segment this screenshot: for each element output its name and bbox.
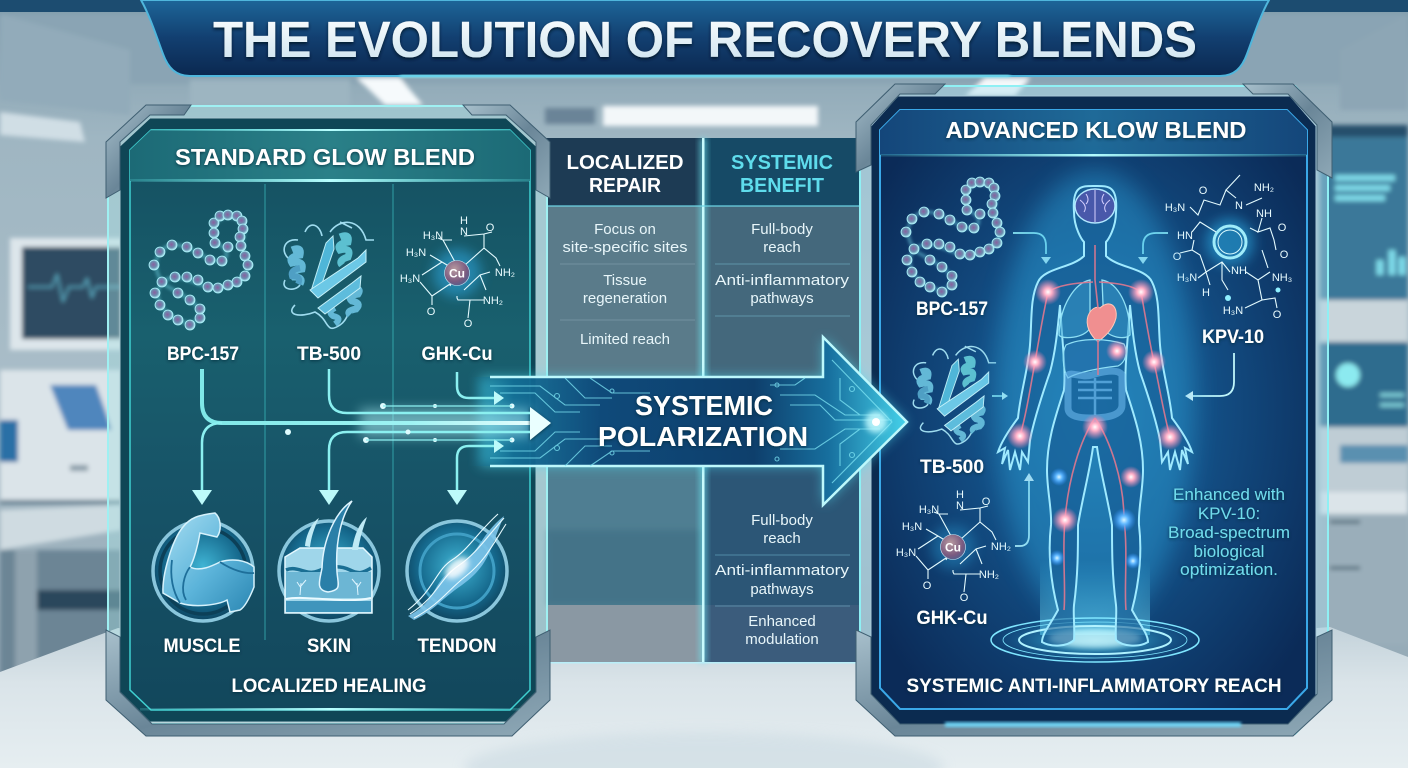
GHK-Cu molecule: NH₂ [483, 295, 503, 307]
circuit traces [490, 360, 892, 483]
label: BPC-157: BPC-157 [916, 299, 988, 320]
GHK-Cu molecule: H₃N [400, 273, 420, 285]
arrow: TB-500 to body [992, 392, 1008, 400]
column: localized repair: LOCALIZED [566, 152, 684, 174]
column: systemic benefit: SYSTEMIC [731, 152, 833, 174]
callout: enhanced with KPV-10 [1168, 485, 1290, 579]
lungs [1059, 280, 1130, 338]
column: systemic benefit: pathways [750, 290, 814, 307]
GHK-Cu molecule: N [460, 226, 468, 238]
column: systemic benefit: reach [763, 239, 801, 256]
title banner [0, 0, 1408, 78]
GHK-Cu molecule: NH₂ [991, 541, 1011, 553]
column: systemic benefit: pathways [750, 581, 814, 598]
flow arrows from peptides to tissues [192, 369, 551, 505]
GHK-Cu molecule [400, 215, 515, 330]
protein icon [913, 346, 996, 444]
label: TB-500: TB-500 [920, 457, 984, 478]
GHK-Cu molecule: H [956, 489, 964, 501]
icon: skin [279, 501, 379, 621]
label: GHK-Cu: GHK-Cu [422, 344, 492, 365]
callout: enhanced with KPV-10: Broad-spectrum [1168, 523, 1290, 542]
icon: muscle [153, 513, 254, 621]
GHK-Cu molecule: N [956, 500, 964, 512]
GHK-Cu molecule: O [486, 222, 495, 234]
KPV-10 molecule: H₃N [1223, 305, 1243, 317]
column: localized repair: regeneration [583, 290, 667, 307]
GHK-Cu molecule: O [923, 580, 932, 592]
trunk arrow from BPC-157 [192, 369, 530, 505]
column: systemic benefit: modulation [745, 631, 819, 648]
KPV-10 molecule: H [1202, 287, 1210, 299]
GHK-Cu molecule: O [960, 592, 969, 604]
GHK-Cu molecule: O [427, 306, 436, 318]
label: GHK-Cu: GHK-Cu [916, 608, 988, 629]
KPV-10 molecule [1165, 175, 1292, 321]
KPV-10 molecule: O [1173, 251, 1182, 263]
panel: standard glow blend [106, 105, 550, 736]
column: systemic benefit: Enhanced [748, 613, 816, 630]
GHK-Cu molecule: NH₂ [495, 267, 515, 279]
hologram platform [989, 560, 1201, 664]
brain [1075, 189, 1115, 223]
panel: advanced klow blend [856, 84, 1332, 736]
GHK-Cu molecule: H₃N [406, 247, 426, 259]
panel header band: STANDARD GLOW BLEND [175, 144, 475, 170]
KPV-10 molecule: NH [1231, 265, 1247, 277]
KPV-10 molecule: NH [1256, 208, 1272, 220]
GHK-Cu molecule [896, 489, 1011, 604]
footer: localized healing: LOCALIZED HEALING [232, 676, 426, 697]
GHK-Cu molecule: Cu [449, 266, 465, 280]
panel header band [130, 129, 530, 182]
KPV-10 molecule: NH₂ [1254, 182, 1274, 194]
KPV-10 molecule: NH₃ [1272, 272, 1292, 284]
steel frame brackets [856, 84, 1332, 736]
label: muscle: MUSCLE [164, 636, 240, 657]
label: tendon: TENDON [418, 636, 496, 657]
KPV-10 molecule: H₃N [1165, 202, 1185, 214]
arrow: BPC-157 to body [1013, 233, 1051, 264]
label: KPV-10: KPV-10 [1202, 327, 1264, 348]
column: systemic benefit: Anti-inflammatory [715, 562, 850, 579]
column: localized repair: REPAIR [589, 175, 662, 197]
GHK-Cu molecule: H₃N [896, 547, 916, 559]
GHK-Cu molecule: O [982, 496, 991, 508]
KPV-10 molecule: O [1278, 222, 1287, 234]
comparison table [546, 138, 860, 664]
left monitor [10, 238, 125, 350]
arrow: GHK-Cu to body [1015, 473, 1034, 546]
KPV-10 molecule: HN [1177, 230, 1193, 242]
label: BPC-157: BPC-157 [167, 344, 239, 365]
body silhouette [998, 186, 1192, 646]
protein icon [284, 222, 374, 328]
column: systemic benefit: Anti-inflammatory [715, 272, 850, 289]
arrow label: POLARIZATION [598, 421, 808, 452]
column: systemic benefit: Full-body [751, 221, 813, 238]
label: skin: SKIN [307, 636, 351, 657]
footer: systemic reach: SYSTEMIC ANTI-INFLAMMATORY REACH [906, 676, 1282, 697]
intestines [1068, 371, 1122, 418]
column: localized repair: Limited reach [580, 331, 670, 348]
column: systemic benefit: BENEFIT [740, 175, 824, 197]
GHK-Cu molecule: H₃N [919, 504, 939, 516]
column: localized repair: Focus on [594, 221, 656, 238]
peptide chain icon [901, 177, 1005, 297]
arrow: KPV-10 molecule to body [1138, 233, 1168, 264]
GHK-Cu molecule: H₃N [423, 230, 443, 242]
central arrow: systemic polarization [470, 337, 907, 505]
vessels [1020, 245, 1170, 610]
arrow: KPV-10 label to body [1185, 353, 1234, 401]
callout: enhanced with KPV-10: Enhanced with [1173, 485, 1285, 504]
column: localized repair [546, 138, 703, 663]
KPV-10 molecule: O [1199, 185, 1208, 197]
GHK-Cu molecule: H₃N [902, 521, 922, 533]
arrows from GHK-Cu [447, 372, 504, 505]
peptide chain icon [149, 210, 253, 330]
column: localized repair: site-specific sites [562, 239, 688, 256]
label: TB-500: TB-500 [297, 344, 361, 365]
arrows from TB-500 [319, 369, 530, 505]
callout: enhanced with KPV-10: KPV-10: [1198, 504, 1260, 523]
KPV-10 molecule: O [1280, 249, 1289, 261]
KPV-10 molecule: O [1273, 309, 1282, 321]
column: localized repair: Tissue [603, 272, 647, 289]
callout: enhanced with KPV-10: biological [1194, 542, 1264, 561]
GHK-Cu molecule: NH₂ [979, 569, 999, 581]
panel header band: ADVANCED KLOW BLEND [946, 117, 1246, 143]
arrow label [598, 390, 808, 452]
GHK-Cu molecule: O [464, 318, 473, 330]
steel frame brackets [106, 105, 550, 736]
human body figure [989, 170, 1201, 664]
right monitors [1320, 125, 1408, 300]
column: systemic benefit: reach [763, 530, 801, 547]
callout: enhanced with KPV-10: optimization. [1180, 560, 1278, 579]
GHK-Cu molecule: H [460, 215, 468, 227]
icon: tendon [407, 514, 507, 621]
column: systemic benefit: Full-body [751, 512, 813, 529]
KPV-10 molecule: N [1235, 200, 1243, 212]
signal nodes [285, 403, 514, 443]
panel header band [880, 110, 1307, 156]
title text: THE EVOLUTION OF RECOVERY BLENDS [213, 11, 1197, 68]
glowing joints [1007, 279, 1183, 569]
column: systemic benefit [703, 138, 860, 663]
heart [1087, 304, 1116, 342]
GHK-Cu molecule: Cu [945, 540, 961, 554]
arrow label: SYSTEMIC [635, 390, 773, 421]
liver and stomach [1063, 340, 1126, 378]
KPV-10 molecule: H₃N [1177, 272, 1197, 284]
